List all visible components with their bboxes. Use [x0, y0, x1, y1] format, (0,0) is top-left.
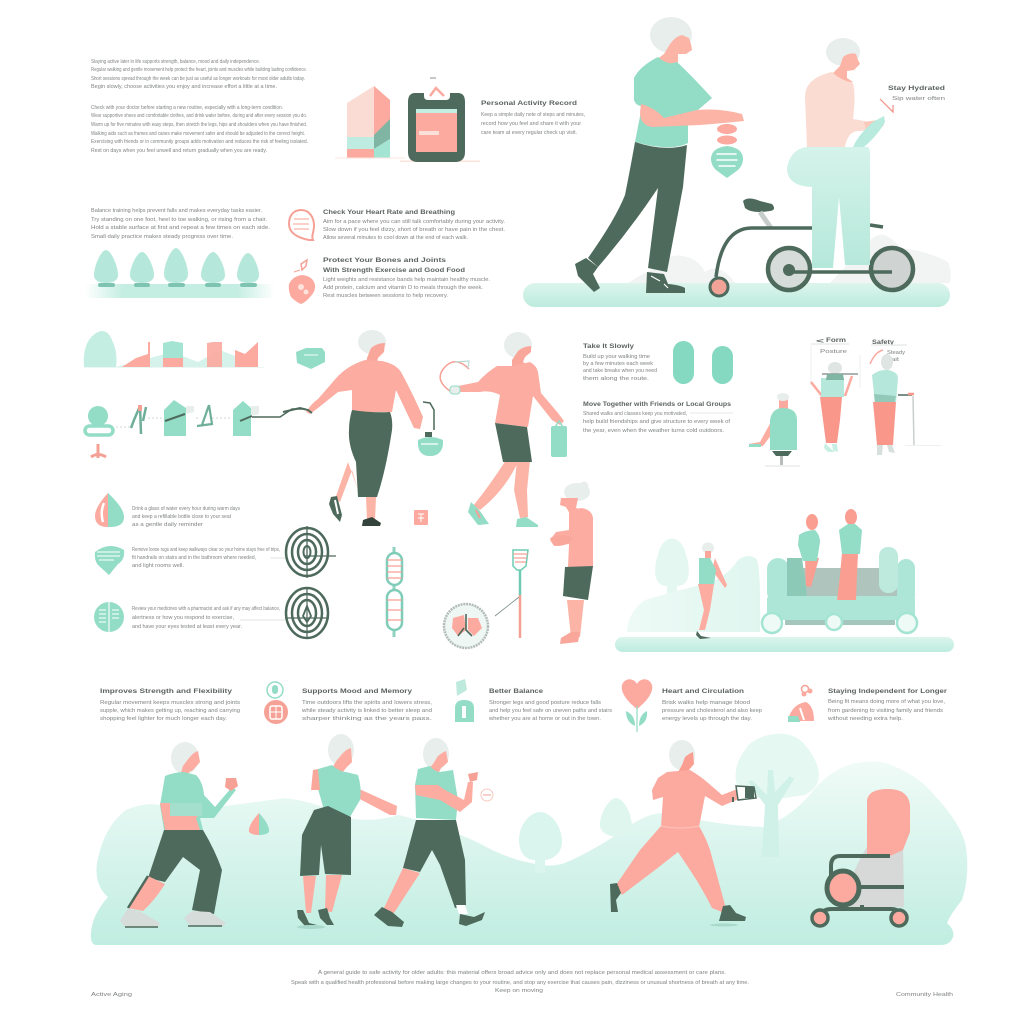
figure: person holding tray with cue label: [811, 337, 860, 452]
figure: person with cane and label: Safety: [872, 339, 894, 346]
text block: intro paragraphs: Warm up for five minutes with easy steps, then stretch the legs, hips and shoulders when you have finished.: [91, 122, 307, 128]
text block: book note: [132, 606, 280, 630]
text block: nutrition caption: Protect Your Bones and Joints: [323, 257, 446, 264]
text block: benefit 4: [662, 688, 762, 722]
text block: benefit 3: [488, 688, 612, 722]
text block: benefit 3: Stronger legs and good posture reduce falls: [489, 700, 601, 706]
text block: benefit 5: from gardening to visiting family and friends: [828, 708, 943, 714]
icon: magnified heart circle: [444, 604, 488, 648]
text block: shield note: fit handrails on stairs and in the bathroom where needed,: [132, 555, 256, 561]
icon: mint bottle and leaf: [455, 679, 474, 722]
text block: book note: and have your eyes tested at least every year.: [132, 624, 242, 630]
figure: two people on sofa: [798, 509, 862, 600]
icon: hanging speech drop: [711, 124, 743, 178]
text block: capsule caption: [583, 343, 657, 382]
text block: capsule caption: them along the route.: [583, 376, 650, 382]
text block: footer note: Speak with a qualified health professional before making large changes to your routine, and stop any exercise that causes pain, dizziness or unusual shortness of breath at any time.: [291, 980, 749, 986]
text block: note caption: Aim for a pace where you can still talk comfortably during your activity.: [323, 219, 505, 225]
text block: bottle caption: Sip water often: [892, 96, 945, 102]
text block: benefit 4: Heart and Circulation: [662, 688, 744, 695]
text block: clipboard caption: [481, 100, 585, 136]
icon: mint tote bag: [551, 421, 567, 457]
figure: person holding tray with cue label: Posture: [820, 349, 847, 355]
chart: target rings bottom: [240, 588, 329, 638]
text block: note caption: Allow several minutes to cool down at the end of each walk.: [323, 235, 468, 241]
text block: hydration note: Drink a glass of water every hour during warm days: [132, 506, 240, 512]
text block: clipboard caption: care team at every regular check up visit.: [481, 130, 577, 136]
icon: small split drop: [249, 813, 269, 835]
text block: intro paragraphs: Wear supportive shoes and comfortable clothes, and drink water before, during and after every session you do.: [91, 113, 307, 119]
text block: clipboard caption: record how you feel and share it with your: [481, 121, 581, 127]
icon: salmon heart fruit: [289, 260, 315, 304]
figure: runner in salmon suit: [610, 740, 746, 926]
text block: nutrition caption: Rest muscles between sessions to help recovery.: [323, 293, 448, 299]
icon row: five mint trees: [85, 248, 275, 298]
icon: water flask hanging from woman's hand: [418, 402, 443, 456]
icon: resistance ring: [440, 361, 469, 394]
text block: movement paragraph: Hold a stable surface at first and repeat a few times on each side.: [91, 225, 271, 231]
figure: person holding tray with cue label: Form: [826, 337, 846, 344]
text block: clipboard caption: Keep a simple daily note of steps and minutes,: [481, 112, 585, 118]
icon: mint shield: [95, 546, 124, 575]
text block: intro paragraphs: Short sessions spread through the week can be just as useful as longer workouts for most older adults today.: [91, 76, 305, 82]
text block: movement paragraph: Small daily practice makes steady progress over time.: [91, 234, 233, 240]
icon: salmon note: [289, 210, 314, 240]
text block: book note: Review your medicines with a pharmacist and ask if any may affect balance,: [132, 606, 280, 612]
text block: stay social caption: Shared walks and classes keep you motivated,: [583, 411, 687, 417]
icon: clipboard: [400, 78, 480, 162]
icon: stacked capsule: [387, 547, 402, 637]
icon: mint badge: [296, 348, 325, 369]
text block: benefit 5: without needing extra help.: [827, 716, 904, 722]
text block: benefit 1: [100, 688, 240, 722]
text block: stay social caption: Move Together with Friends or Local Groups: [583, 401, 731, 408]
text block: intro paragraphs: Rest on days when you feel unwell and return gradually when you are ready.: [91, 148, 267, 154]
text block: movement paragraph: Balance training helps prevent falls and makes everyday tasks easier.: [91, 208, 262, 214]
text block: footer note: Keep on moving: [495, 988, 543, 994]
text block: benefit 4: Brisk walks help manage blood: [662, 700, 750, 706]
figure: person B in mint shirt with dark shorts: [297, 734, 397, 929]
icon: split drop: [95, 493, 124, 527]
text block: nutrition caption: [323, 257, 490, 299]
text block: capsule caption: Take It Slowly: [583, 343, 634, 350]
text block: benefit 2: while steady activity is linked to better sleep and: [301, 708, 432, 714]
text block: benefit 1: Regular movement keeps muscles strong and joints: [100, 700, 240, 706]
text: footer left credit: Active Aging: [91, 992, 132, 998]
icon: window badge: [264, 682, 288, 724]
text block: intro paragraphs: Check with your doctor before starting a new routine, especially with a long-term condition.: [91, 105, 283, 111]
figure: person with cane and label: [870, 339, 941, 455]
figure: walking older adult in mint shirt: [575, 17, 744, 293]
text block: nutrition caption: With Strength Exercise and Good Food: [323, 267, 465, 274]
text block: note caption: Check Your Heart Rate and Breathing: [323, 209, 455, 216]
text block: note caption: Slow down if you feel dizzy, short of breath or have pain in the chest.: [323, 227, 506, 233]
text block: shield note: and light rooms well.: [132, 563, 184, 569]
text block: benefit 4: pressure and cholesterol and also keep: [662, 708, 762, 714]
icon: lollipop measuring stick: [495, 550, 528, 638]
text block: benefit 5: Being fit means doing more of what you love,: [828, 699, 945, 705]
text block: benefit 4: energy levels up through the day.: [662, 716, 753, 722]
text block: shield note: [132, 547, 280, 569]
ground: top scene: [523, 235, 951, 307]
text block: footer note: A general guide to safe activity for older adults: this material offers broad advice only and does not replace personal medical assessment or care plans.: [318, 970, 727, 976]
icon: two mint capsules: [673, 341, 733, 384]
text block: benefit 3: and help you feel safe on uneven paths and stairs: [489, 708, 612, 714]
icon: mobility chair: [812, 789, 910, 926]
text block: benefit 1: Improves Strength and Flexibility: [100, 688, 232, 695]
figure: person holding tray with cue label: <: [816, 338, 824, 345]
icon: mint book circle: [94, 602, 124, 632]
icon: heart flower: [622, 679, 652, 732]
text block: intro paragraphs: Staying active later in life supports strength, balance, mood and daily independence.: [91, 59, 260, 65]
figure: person with cane and label: gait: [887, 357, 900, 363]
text block: capsule caption: Build up your walking time: [583, 354, 650, 360]
text block: capsule caption: by a few minutes each week: [583, 361, 653, 367]
icon: handheld phone: [733, 786, 756, 802]
icon: flower and salmon leaf: [788, 686, 814, 722]
icon row: exercise pictograms: [85, 400, 305, 458]
text block: stay social caption: [583, 401, 733, 434]
scene: park background hills and trees: [91, 734, 967, 945]
text block: hydration note: as a gentle daily reminder: [132, 522, 203, 528]
text block: intro paragraphs: Regular walking and gentle movement help protect the heart, joints and muscles while building lasting confidence.: [91, 67, 307, 73]
text block: intro paragraphs: Exercising with friends or in community groups adds motivation and reduces the risk of feeling isolated.: [91, 139, 308, 145]
text block: benefit 3: Better Balance: [489, 688, 543, 695]
text block: bottle caption: [888, 85, 945, 102]
text block: hydration note: [132, 506, 240, 528]
text block: book note: alertness or how you respond to exercise,: [132, 615, 234, 621]
text block: movement paragraph: [91, 208, 271, 240]
text block: benefit 2: [301, 688, 433, 722]
chart: landscape area strip: [84, 331, 264, 368]
icon: teal sofa with wheels: [762, 547, 917, 633]
icon: building blocks: [335, 86, 405, 158]
text block: shield note: Remove loose rugs and keep walkways clear so your home stays free of trips,: [132, 547, 280, 553]
text block: benefit 2: Time outdoors lifts the spirits and lowers stress,: [302, 700, 433, 706]
figure: small walking person: [696, 542, 727, 639]
chart: target rings top: [270, 526, 336, 578]
ground: sofa scene with hill and tree: [615, 538, 954, 652]
text block: benefit 1: supple, which makes getting up, reaching and carrying: [100, 708, 240, 714]
text block: stay social caption: help build friendships and give structure to every week of: [583, 419, 730, 425]
text block: intro paragraphs: Begin slowly, choose activities you enjoy and increase effort a little at a time.: [91, 84, 277, 90]
text block: benefit 2: Supports Mood and Memory: [302, 688, 412, 695]
text block: benefit 1: shopping feel lighter for much longer each day.: [100, 716, 228, 722]
text block: intro paragraphs: [91, 59, 308, 154]
text block: benefit 5: Staying Independent for Longer: [828, 688, 948, 695]
figure: older adult with bottle and bicycle: [710, 38, 913, 296]
figure: person A in mint shirt, boxing stance: [120, 742, 238, 927]
figure: person C walking with weight: [374, 738, 493, 927]
icon: salmon tag: [414, 510, 428, 525]
text block: hydration note: and keep a refillable bottle close to your seat: [132, 514, 231, 520]
text block: capsule caption: and take breaks when you need: [583, 368, 657, 374]
text block: nutrition caption: Add protein, calcium and vitamin D to meals through the week.: [323, 285, 483, 291]
text block: clipboard caption: Personal Activity Record: [481, 100, 577, 107]
text block: stay social caption: the year, even when the weather turns cold outdoors.: [583, 428, 725, 434]
figure: person with cane and label: Steady: [887, 350, 905, 356]
figure: woman walking in salmon top with dark capri: [283, 330, 423, 526]
figure: woman walking with bag and ring: [458, 332, 564, 527]
text block: benefit 3: whether you are at home or out in the town.: [488, 716, 601, 722]
text block: footer note: [291, 970, 749, 994]
text block: benefit 5: [827, 688, 948, 722]
figure: woman in pink top looking down: [550, 482, 593, 644]
text block: nutrition caption: Light weights and resistance bands help maintain healthy muscle.: [323, 277, 490, 283]
text block: benefit 2: sharper thinking as the years pass.: [302, 716, 433, 722]
text block: bottle caption: Stay Hydrated: [888, 85, 945, 92]
figure: seated person from behind: [749, 393, 800, 467]
text block: note caption: [323, 209, 506, 241]
text block: intro paragraphs: Walking aids such as frames and canes make movement safer and should be adjusted to the correct height.: [91, 131, 305, 137]
text block: movement paragraph: Try standing on one foot, heel to toe walking, or rising from a chair.: [91, 217, 268, 223]
text: footer right credit: Community Health: [896, 992, 953, 998]
